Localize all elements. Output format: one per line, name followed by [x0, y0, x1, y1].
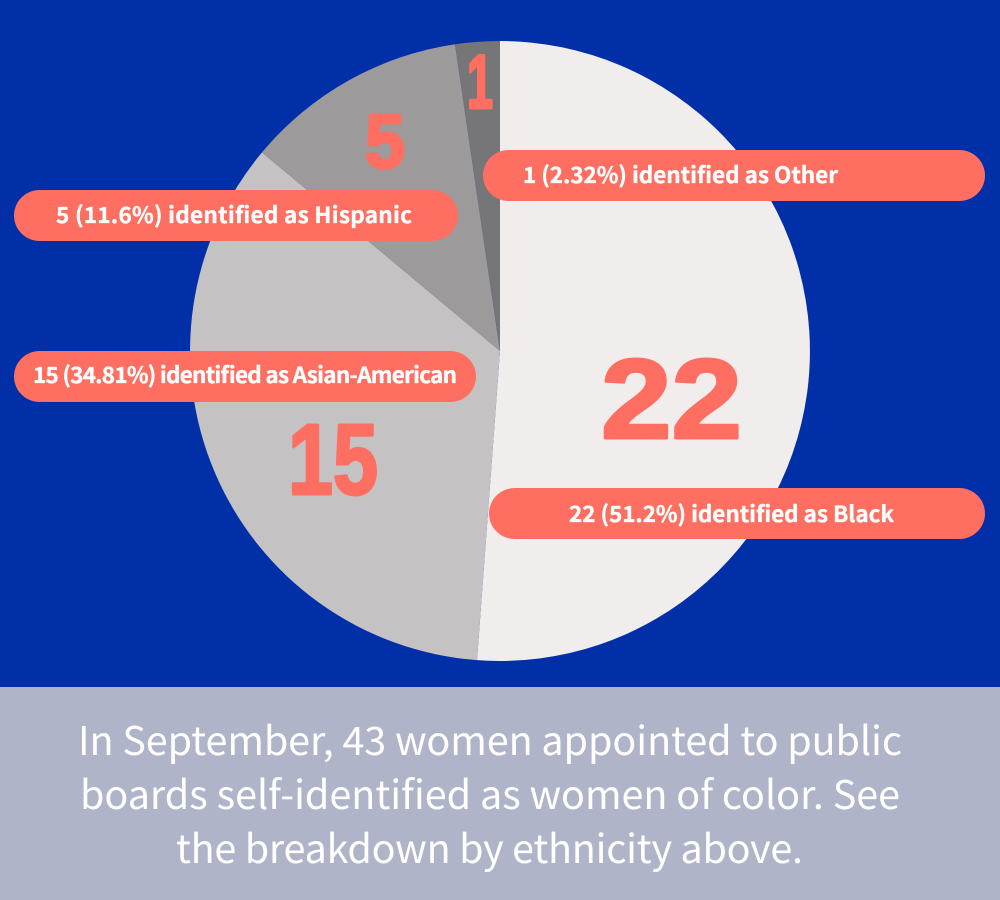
- number: 1: 1: [467, 40, 493, 125]
- caption panel: [0, 687, 1000, 900]
- number: 22: 22: [601, 336, 742, 462]
- caption text: boards self-identified as women of color. See: [80, 764, 900, 821]
- background panel: [0, 0, 1000, 687]
- callout: Other: [483, 150, 985, 201]
- callout: Black: [489, 488, 985, 539]
- callout: Asian-American: 15 (34.81%) identified as Asian-American: [33, 358, 457, 390]
- number: 15: 15: [288, 404, 378, 516]
- slice: Other 1: [455, 41, 500, 351]
- slice: Hispanic 5: [262, 44, 500, 351]
- pie chart: [190, 41, 810, 661]
- callout: Hispanic: 5 (11.6%) identified as Hispanic: [56, 198, 412, 230]
- callout: Hispanic: [14, 190, 458, 241]
- callout: Black: 22 (51.2%) identified as Black: [569, 497, 894, 529]
- slice: Asian-American 15: [190, 152, 500, 660]
- slice: Black 22: [477, 41, 810, 661]
- callout: Other: 1 (2.32%) identified as Other: [523, 158, 838, 190]
- number: 5: 5: [365, 100, 405, 185]
- caption text: the breakdown by ethnicity above.: [176, 818, 803, 875]
- caption text: [78, 710, 902, 875]
- caption text: In September, 43 women appointed to public: [78, 710, 902, 767]
- callout: Asian-American: [14, 351, 476, 402]
